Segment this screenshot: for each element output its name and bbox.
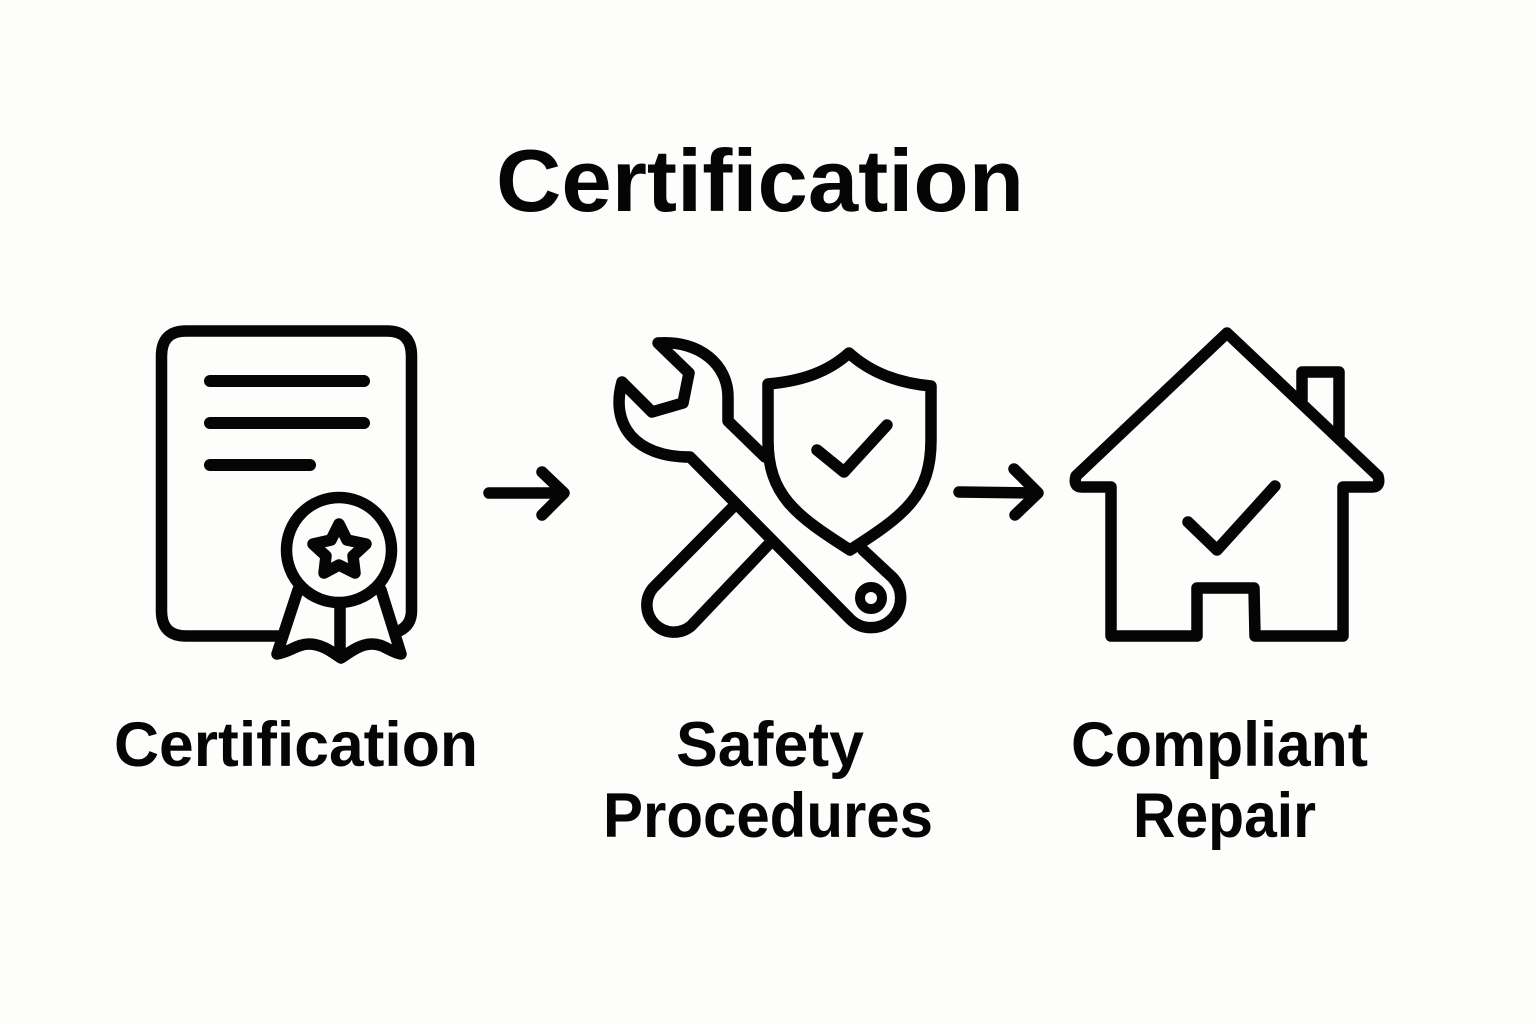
icon: wrench and shield <box>619 343 931 632</box>
chimney <box>1302 372 1339 435</box>
label: safety procedures: Procedures <box>603 781 933 851</box>
label: certification: Certification <box>114 710 478 780</box>
house check <box>1188 486 1275 550</box>
shield <box>768 353 931 550</box>
label: safety procedures <box>603 710 933 851</box>
icon: certificate document with ribbon <box>162 331 412 658</box>
title: Certification <box>496 131 1024 230</box>
label: compliant repair: Compliant <box>1071 710 1368 780</box>
arrow: certification to safety <box>489 472 564 515</box>
arrow: safety to repair <box>959 469 1038 515</box>
icon: house with check <box>1075 333 1379 636</box>
label: safety procedures: Safety <box>676 710 864 780</box>
wrench hole <box>860 587 882 609</box>
label: compliant repair <box>1071 710 1368 851</box>
label: compliant repair: Repair <box>1133 781 1316 851</box>
shield check <box>817 425 887 472</box>
screwdriver handle <box>647 508 768 632</box>
wrench <box>619 343 901 628</box>
